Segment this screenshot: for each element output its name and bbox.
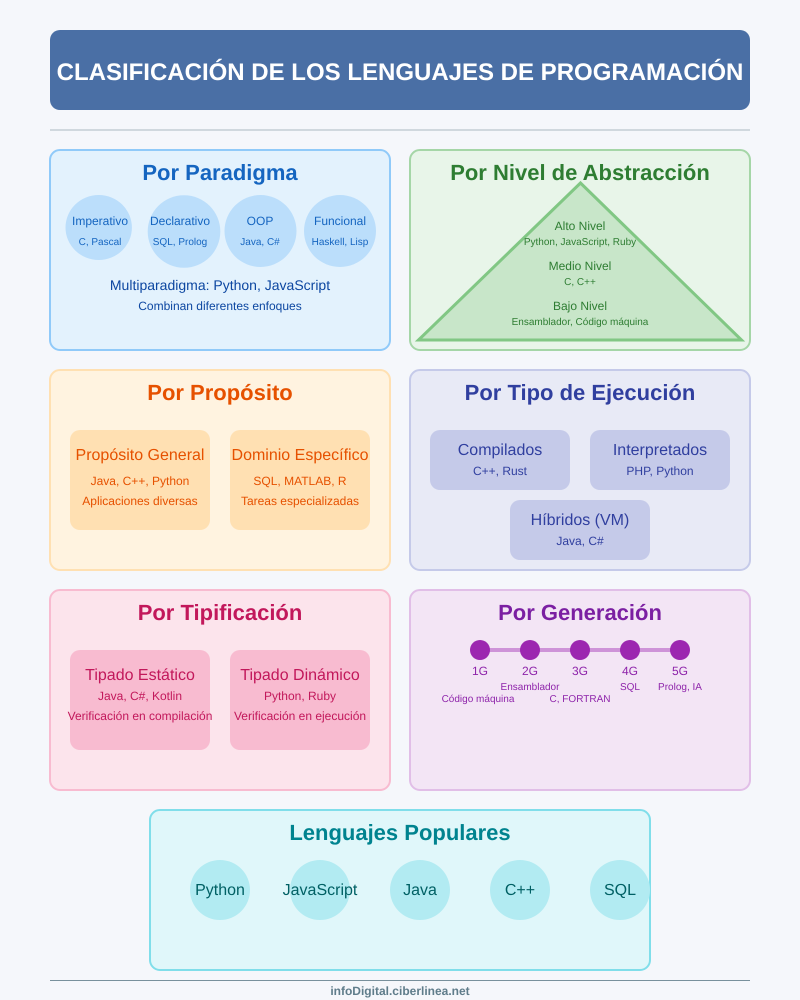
generation labels: 3G <box>572 664 588 678</box>
generation labels: Código máquina <box>442 694 515 705</box>
card: tipado dinamico: Python, Ruby <box>264 689 336 703</box>
level: alto nivel: Python, JavaScript, Ruby <box>524 237 636 248</box>
generation labels <box>442 664 702 705</box>
panel: por paradigma <box>50 150 390 350</box>
card: compilados <box>430 430 570 490</box>
language: sql: SQL <box>604 882 636 899</box>
circle: funcional <box>304 195 376 267</box>
card: tipado dinamico: Verificación en ejecución <box>234 709 366 723</box>
card: dominio especifico <box>230 430 370 530</box>
level: alto nivel: Alto Nivel <box>555 219 605 233</box>
level: medio nivel: C, C++ <box>564 277 596 288</box>
card: proposito general: Java, C++, Python <box>91 474 189 488</box>
panel: por generacion <box>410 590 750 790</box>
language: java <box>390 860 450 920</box>
card: dominio especifico: Tareas especializadas <box>241 494 359 508</box>
pyramid <box>418 183 742 340</box>
card: interpretados: Interpretados <box>613 442 707 459</box>
heading: lenguajes populares: Lenguajes Populares <box>289 820 511 845</box>
circle: declarativo <box>148 195 220 268</box>
heading: por tipo de ejecucion: Por Tipo de Ejecución <box>465 380 695 405</box>
card: tipado estatico: Verificación en compilación <box>68 709 212 723</box>
level: bajo nivel: Bajo Nivel <box>553 299 607 313</box>
circle: oop: OOP <box>247 214 273 228</box>
circle: funcional: Funcional <box>314 214 366 228</box>
level: bajo nivel: Ensamblador, Código máquina <box>512 317 649 328</box>
circle: imperativo <box>66 195 132 260</box>
heading: por paradigma: Por Paradigma <box>142 160 298 185</box>
heading: por tipificacion: Por Tipificación <box>138 600 302 625</box>
circle: funcional: Haskell, Lisp <box>312 237 369 248</box>
card: dominio especifico: Dominio Específico <box>232 447 369 464</box>
heading: por proposito: Por Propósito <box>147 380 293 405</box>
card: proposito general: Propósito General <box>76 447 204 464</box>
text: multiparadigma <box>110 277 330 313</box>
card: compilados: C++, Rust <box>473 464 528 478</box>
circle: imperativo: Imperativo <box>72 214 128 228</box>
heading: por generacion: Por Generación <box>498 600 662 625</box>
language: c++ <box>490 860 550 920</box>
card: hibridos <box>510 500 650 560</box>
card: hibridos: Híbridos (VM) <box>531 512 629 529</box>
level: bajo nivel <box>512 299 649 328</box>
generation labels: 4G <box>622 664 638 678</box>
language: python: Python <box>195 882 245 899</box>
generation labels: 2G <box>522 664 538 678</box>
language: python <box>190 860 250 920</box>
text: multiparadigma: Multiparadigma: Python, JavaScript <box>110 277 330 293</box>
card: tipado estatico: Java, C#, Kotlin <box>98 689 182 703</box>
panel: por proposito <box>50 370 390 570</box>
footer: infoDigital.ciberlinea.net <box>330 984 470 998</box>
generation labels: 5G <box>672 664 688 678</box>
card: tipado dinamico <box>230 650 370 750</box>
card: tipado dinamico: Tipado Dinámico <box>240 667 360 684</box>
generation labels: SQL <box>620 682 640 693</box>
timeline <box>470 640 690 660</box>
title banner: CLASIFICACIÓN DE LOS LENGUAJES DE PROGRAMACIÓN <box>57 58 743 86</box>
card: proposito general <box>70 430 210 530</box>
circle: imperativo: C, Pascal <box>79 237 121 248</box>
text: multiparadigma: Combinan diferentes enfoques <box>138 299 302 313</box>
heading: por nivel de abstraccion: Por Nivel de Abstracción <box>450 160 710 185</box>
circle: declarativo: SQL, Prolog <box>153 237 207 248</box>
level: medio nivel: Medio Nivel <box>549 259 611 273</box>
panel: por tipo de ejecucion <box>410 370 750 570</box>
card: compilados: Compilados <box>458 442 542 459</box>
circle: oop <box>224 195 296 267</box>
generation labels: C, FORTRAN <box>550 694 610 705</box>
card: hibridos: Java, C# <box>556 534 604 548</box>
title banner <box>50 30 750 110</box>
language: c++: C++ <box>505 882 535 899</box>
generation labels: Ensamblador <box>501 682 560 693</box>
language: javascript: JavaScript <box>283 882 358 899</box>
card: tipado estatico <box>68 650 212 750</box>
card: interpretados <box>590 430 730 490</box>
level: alto nivel <box>524 219 636 248</box>
card: proposito general: Aplicaciones diversas <box>82 494 198 508</box>
circle: oop: Java, C# <box>240 237 280 248</box>
circle: declarativo: Declarativo <box>150 214 210 228</box>
level: medio nivel <box>549 259 611 288</box>
language: java: Java <box>403 882 437 899</box>
language: javascript <box>283 860 358 920</box>
card: tipado estatico: Tipado Estático <box>85 667 195 684</box>
card: interpretados: PHP, Python <box>626 464 694 478</box>
panel: por nivel de abstraccion <box>410 150 750 350</box>
card: dominio especifico: SQL, MATLAB, R <box>253 474 347 488</box>
generation labels: Prolog, IA <box>658 682 702 693</box>
panel: lenguajes populares <box>150 810 650 970</box>
panel: por tipificacion <box>50 590 390 790</box>
generation labels: 1G <box>472 664 488 678</box>
language: sql <box>590 860 650 920</box>
